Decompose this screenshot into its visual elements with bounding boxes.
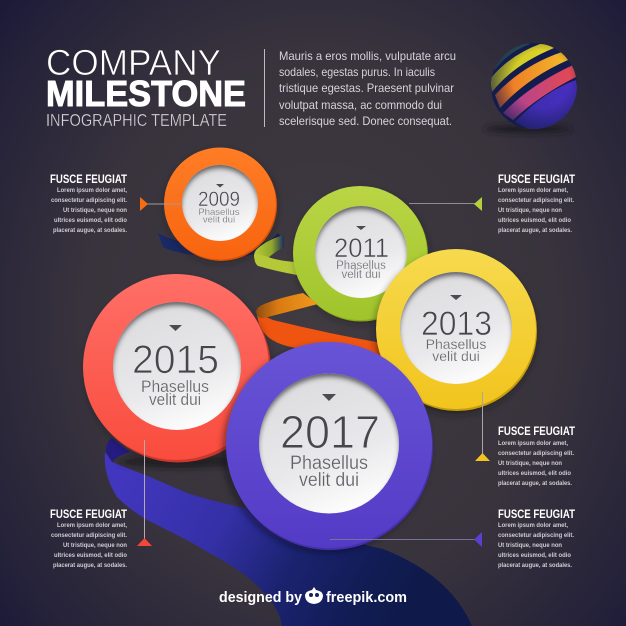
circle: 2017: Phasellus [290,453,368,474]
subtitle: INFOGRAPHIC TEMPLATE [46,110,227,130]
circle: 2009: 2009 [198,188,240,211]
text block: middle right: placerat augue, at sodales. [498,480,572,487]
footer credit [219,587,407,606]
text block: top right: ultrices euismod, elit odio [498,217,571,224]
text block: middle right [498,424,576,487]
title block [46,42,246,130]
connector: yellow [475,392,490,461]
text block: top right [498,172,576,234]
blue ribbon [105,438,472,626]
intro paragraph: volutpat massa, ac commodo dui [279,98,442,112]
circle: 2009: Phasellus [198,207,240,218]
text block: top right: consectetur adipiscing elit. [498,197,574,204]
circle: 2015: 2015 [132,338,219,382]
circle: 2011: 2011 [334,233,389,263]
circle: 2017: velit dui [299,470,359,491]
navy ribbon [158,233,282,258]
text block: top left: Lorem ipsum dolor amet, [57,187,127,194]
circle: 2017: 2017 [280,406,380,458]
text block: top left [50,172,128,234]
footer credit: designed by [219,590,302,606]
intro paragraph [279,49,456,128]
connector: orange [140,197,183,211]
circle: 2013: velit dui [432,348,480,364]
text block: top left: Ut tristique, neque non [63,207,127,214]
circle: 2013 [375,249,537,414]
text block: bottom right: consectetur adipiscing elit. [498,532,574,539]
title: milestone: MILESTONE [46,73,246,114]
text block: bottom right [498,507,576,569]
text block: bottom left: Lorem ipsum dolor amet, [57,522,127,529]
text block: bottom right: Ut tristique, neque non [498,542,562,549]
text block: middle right: ultrices euismod, elit odio [498,470,571,477]
circle: 2011: velit dui [342,269,380,281]
text block: bottom left [50,507,128,569]
text block: top right: FUSCE FEUGIAT [498,172,576,186]
intro paragraph: sodales, egestas purus. In iaculis [279,65,435,79]
connector: green [409,197,482,211]
text block: top right: placerat augue, at sodales. [498,227,572,234]
circle: 2013: Phasellus [426,336,486,352]
circle: 2015: Phasellus [141,377,209,396]
circle: 2011: Phasellus [336,260,386,272]
header divider and paragraph [264,49,456,128]
connector: purple [330,532,482,547]
text block: bottom left: placerat augue, at sodales. [53,562,127,569]
text block: bottom right: placerat augue, at sodales. [498,562,572,569]
text block: bottom right: Lorem ipsum dolor amet, [498,522,568,529]
footer credit: freepik.com [326,590,407,606]
text block: top left: FUSCE FEUGIAT [50,172,128,186]
text block: bottom left: Ut tristique, neque non [63,542,127,549]
icon: striped sphere [484,40,580,133]
text block: bottom right: FUSCE FEUGIAT [498,507,576,521]
text block: middle right: consectetur adipiscing elit. [498,450,574,457]
circle: 2011 [293,186,428,323]
circle: 2015: velit dui [149,390,201,409]
intro paragraph: Mauris a eros mollis, vulputate arcu [279,49,456,63]
circle: 2009: velit dui [203,214,235,226]
title: company: COMPANY [46,42,221,83]
text block: middle right: Lorem ipsum dolor amet, [498,440,568,447]
text block: top left: ultrices euismod, elit odio [54,217,127,224]
text block: top right: Ut tristique, neque non [498,207,562,214]
text block: top right: Lorem ipsum dolor amet, [498,187,568,194]
text block: bottom right: ultrices euismod, elit odio [498,552,571,559]
text block: middle right: FUSCE FEUGIAT [498,424,576,438]
text block: bottom left: FUSCE FEUGIAT [50,507,128,521]
orange ribbon [256,293,382,360]
circle: 2017 [224,342,433,551]
text block: middle right: Ut tristique, neque non [498,460,562,467]
text block: top left: consectetur adipiscing elit. [51,197,127,204]
green ribbon [254,235,297,275]
circle: 2015 [83,274,271,468]
text block: bottom left: ultrices euismod, elit odio [54,552,127,559]
icon: freepik logo [305,587,323,604]
text block: bottom left: consectetur adipiscing elit. [51,532,127,539]
intro paragraph: scelerisque sed. Donec consequat. [279,114,452,128]
intro paragraph: tristique egestas. Praesent pulvinar [279,81,454,95]
text block: top left: placerat augue, at sodales. [53,227,127,234]
circle: 2009 [164,148,277,262]
circle: 2013: 2013 [421,305,492,343]
connector: red [137,440,152,546]
